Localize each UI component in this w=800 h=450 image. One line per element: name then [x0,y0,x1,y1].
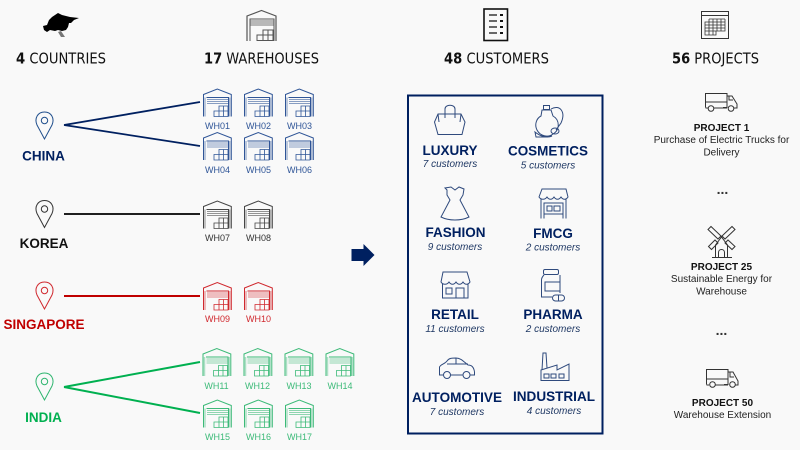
text: industrial: 4 customers [527,406,581,417]
icon: calendar [702,12,728,38]
text: industrial: INDUSTRIAL [513,389,595,404]
heading: 48 customers: 48 CUSTOMERS [444,50,549,68]
text: cosmetics: 5 customers [521,160,575,172]
text: pharma [523,307,583,335]
text: luxury: 7 customers [423,159,477,170]
icon: Singapore pin [36,282,53,309]
text: pharma: PHARMA [523,307,583,322]
heading: 17 warehouses: 17 WAREHOUSES [204,50,319,68]
icon: India pin [36,373,53,400]
text: cosmetics [508,144,588,172]
connector: Singapore [64,295,200,297]
group: India [25,348,354,442]
icon: customer list [484,9,508,40]
text: project 50: PROJECT 50 [692,398,754,409]
warehouses: India: WH11 [204,381,229,391]
panel: customers [408,96,602,434]
heading: 56 projects: 56 PROJECTS [672,50,759,68]
text: project 25: PROJECT 25 [691,262,753,273]
text: retail: 11 customers [425,324,485,335]
project 1 [654,94,790,158]
text: project 1: PROJECT 1 [694,123,750,134]
warehouses: Singapore: WH10 [246,314,271,324]
warehouses: India: WH13 [286,381,312,391]
connectors: China [64,102,200,146]
text: project 1: Purchase of Electric Trucks for [654,135,790,146]
warehouses: China: WH06 [287,165,312,175]
warehouses: India: WH16 [246,432,271,442]
icon: luxury bag [434,105,465,134]
icon: fashion dress [441,187,469,220]
text: project 50 [674,398,771,421]
warehouses: India: WH14 [327,381,353,391]
group: Singapore [3,282,272,332]
icon: warehouse header [247,10,276,41]
icon: truck [706,370,738,387]
icon: FMCG shop [539,189,568,218]
icon: automotive car [440,358,474,378]
warehouses: India [203,348,354,442]
text: fashion: 9 customers [428,242,482,253]
icon: Korea pin [36,200,53,228]
warehouses: China: WH02 [246,121,271,131]
icon: windmill [708,226,735,258]
label: Korea: KOREA [20,236,69,251]
warehouses: Singapore: WH09 [205,314,230,324]
text: FMCG: 2 customers [525,242,580,254]
connectors: India [64,362,200,413]
text: luxury [422,143,478,170]
warehouses: Korea: WH08 [246,233,271,243]
icon: cosmetics perfume [535,106,563,137]
project 50 [674,370,771,421]
warehouses: China: WH03 [287,121,312,131]
text: cosmetics: COSMETICS [508,144,588,158]
text: automotive: 7 customers [430,407,484,418]
warehouses: China [204,89,313,175]
heading: 4 countries: 4 COUNTRIES [16,50,106,68]
warehouses: Singapore [204,282,272,324]
text: retail: RETAIL [431,307,479,322]
ellipsis: ... [717,181,728,197]
text: fashion [425,225,486,253]
warehouses: Korea [204,201,272,243]
group: Korea [20,200,272,251]
warehouses: India: WH12 [245,381,270,391]
text: automotive [412,390,502,418]
warehouses: China: WH04 [205,165,230,175]
text: fashion: FASHION [425,225,486,240]
icon: map of Asia [43,13,79,37]
icon: China pin [36,112,53,139]
text: project 1: Delivery [703,148,740,158]
text: project 1 [654,123,790,158]
ellipsis: ... [716,322,727,338]
text: project 25 [671,262,773,298]
warehouses: Korea: WH07 [205,233,230,243]
text: project 25: Warehouse [696,286,747,298]
text: luxury: LUXURY [422,143,478,158]
warehouses: India: WH15 [205,432,230,442]
icon: truck [706,94,737,111]
label: India: INDIA [25,410,62,425]
icon: pharma bottle [542,270,564,301]
warehouses: China: WH05 [246,165,271,175]
text: FMCG [525,226,580,254]
text: automotive: AUTOMOTIVE [412,390,502,405]
arrow [352,244,374,266]
warehouses: India: WH17 [287,432,312,442]
text: project 25: Sustainable Energy for [671,274,773,285]
project 25 [671,226,773,298]
icon: industrial factory [541,353,569,380]
text: pharma: 2 customers [525,324,580,335]
text: industrial [513,389,595,417]
connector: Korea [64,213,200,215]
group: China [22,89,313,175]
text: FMCG: FMCG [533,226,573,241]
icon: retail store [441,272,470,298]
label: China: CHINA [22,148,65,164]
label: Singapore: SINGAPORE [3,317,85,332]
warehouses: China: WH01 [205,121,230,131]
text: project 50: Warehouse Extension [674,410,771,421]
text: retail [425,307,485,335]
